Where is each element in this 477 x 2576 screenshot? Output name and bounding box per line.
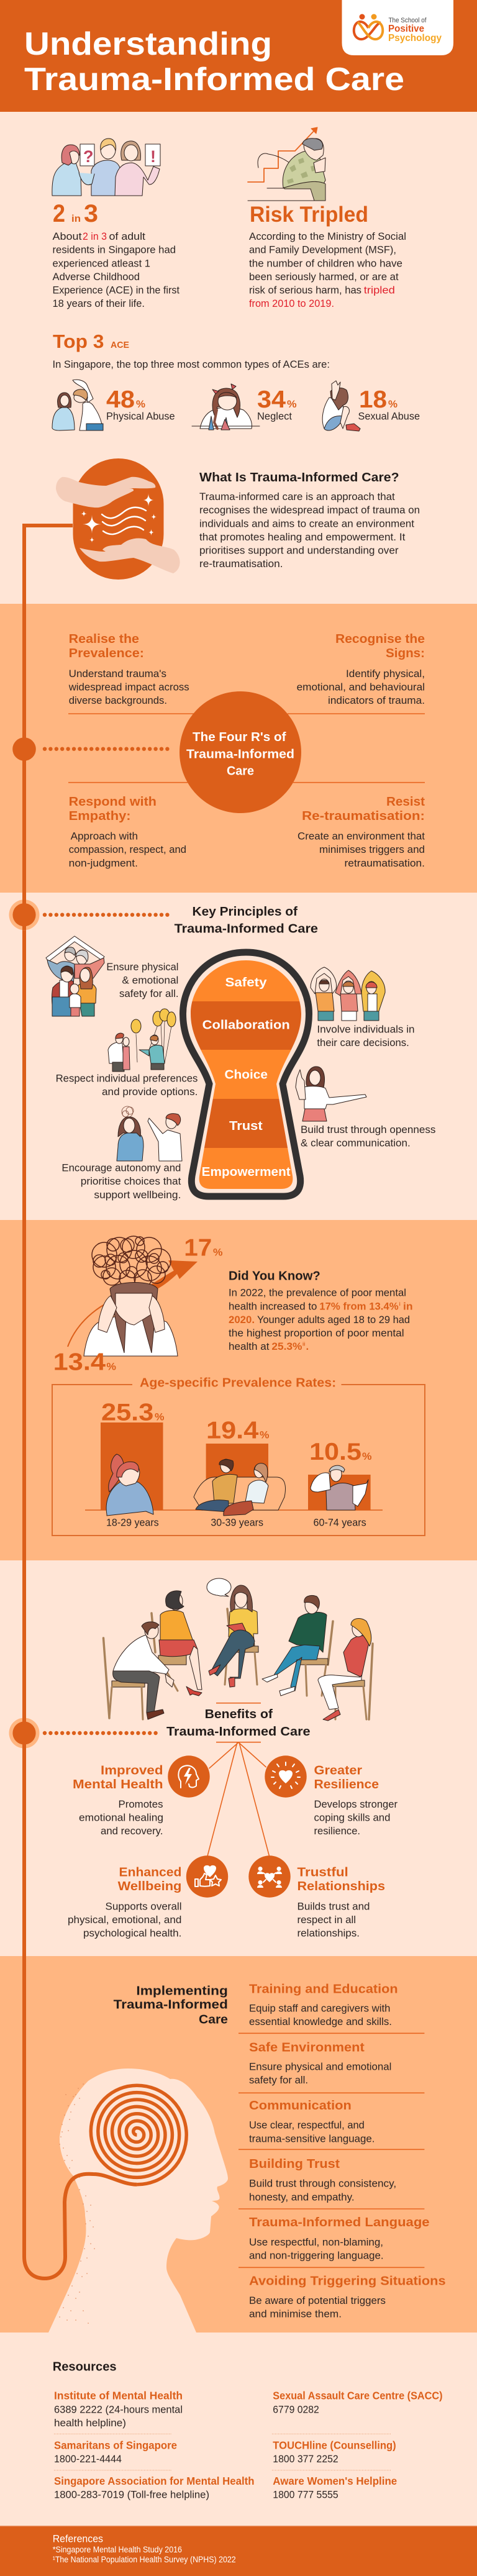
benefit: enhanced wellbeing: Enhanced <box>119 1865 181 1880</box>
text: empowerment description: support wellbeing. <box>94 1189 181 1201</box>
text: did you know body: in <box>403 1300 413 1312</box>
text: did you know body: 25.3% <box>271 1340 302 1352</box>
benefit: enhanced wellbeing: physical, emotional, and <box>68 1914 181 1926</box>
illustration: person on rising stairs <box>248 127 325 201</box>
block: recognise the signs: indicators of trauma. <box>328 694 425 706</box>
illustration: carer untangling a thought <box>117 1106 182 1161</box>
item: communication: Communication <box>249 2098 352 2113</box>
logo card: The School of <box>389 17 427 24</box>
illustration: woman giving thumbs up <box>296 1067 366 1121</box>
stat: 34 percent neglect: Neglect <box>257 411 292 422</box>
heading: implementing <box>114 1984 228 2026</box>
block: recognise the signs: Signs: <box>386 646 425 660</box>
text: trust description <box>301 1124 435 1149</box>
illustration: couple on a sofa <box>194 1459 285 1516</box>
block: realise the prevalence: Prevalence: <box>69 646 144 660</box>
spiral inside head <box>91 2085 186 2185</box>
heading: top 3 ACE <box>53 330 129 352</box>
man in white shirt <box>113 1635 169 1674</box>
labels: age groups: 30-39 years <box>211 1517 263 1529</box>
benefit: improved mental health: Improved <box>101 1764 163 1778</box>
timeline spine with spiral <box>24 526 137 2278</box>
item: avoiding triggering situations: Be aware of potential triggers <box>249 2295 386 2306</box>
text: safety description: safety for all. <box>119 988 179 999</box>
panel: key principles <box>46 904 435 1201</box>
benefit: improved mental health: and recovery. <box>101 1825 163 1837</box>
footer: references <box>0 2526 477 2576</box>
benefit: trustful relationships: Builds trust and <box>297 1900 370 1912</box>
benefit: enhanced wellbeing: Supports overall <box>106 1900 181 1912</box>
resource: touchline: 1800 377 2252 <box>273 2453 338 2465</box>
panel: implementing <box>0 1956 477 2333</box>
text: definition: recognises the widespread impact of trauma on <box>199 504 420 516</box>
block: realise the prevalence: widespread impact across <box>68 681 189 693</box>
text: safety description: Ensure physical <box>106 961 178 973</box>
timeline node: four Rs <box>12 737 168 761</box>
stat: 2 in 3 <box>53 200 98 227</box>
footer: references: References <box>53 2533 103 2545</box>
benefit: greater resilience: Resilience <box>314 1777 379 1791</box>
text: 2 in 3 body: residents in Singapore had <box>52 244 176 256</box>
text: 2 in 3 body: About <box>52 230 82 242</box>
item: trauma-informed language: and non-triggering language. <box>249 2250 384 2262</box>
text: did you know body: In 2022, the prevalence of poor mental <box>229 1287 406 1299</box>
chart arrow: rise from 13.4 to 17 percent <box>68 1260 198 1347</box>
text: risk tripled body: and Family Development (MSF), <box>249 244 396 256</box>
text: trust description: Build trust through openness <box>301 1124 435 1136</box>
resource: samaritans of singapore: Samaritans of Singapore <box>54 2439 177 2451</box>
labels: age groups <box>106 1517 366 1529</box>
chart: age-specific prevalence rates: Age-specific Prevalence Rates: <box>140 1375 336 1390</box>
bar: 60-74 years <box>308 1439 371 1510</box>
stat: 2 in 3: 3 <box>84 200 98 227</box>
resource: singapore association for mental health: Singapore Association for Mental Health <box>54 2475 255 2487</box>
illustration: overwhelmed woman with tangled thoughts <box>84 1236 178 1356</box>
panel: the four Rs <box>0 604 477 893</box>
block: realise the prevalence: Understand trauma's <box>69 668 166 680</box>
illustration: head silhouette <box>48 2069 228 2333</box>
diagram: keyhole of five principles: Trust <box>229 1119 263 1133</box>
text: risk tripled body: tripled <box>364 284 395 296</box>
text: definition <box>199 491 420 570</box>
title: Understanding <box>24 26 272 62</box>
text: 2 in 3 body: 2 in 3 <box>83 230 107 242</box>
stat: 17 percent: % <box>213 1247 222 1258</box>
text: empowerment description: Encourage autonomy and <box>61 1162 181 1174</box>
man in green sweater <box>289 1612 327 1652</box>
resource: institute of mental health: 6389 2222 (24-hours mental <box>54 2403 183 2415</box>
text: 2 in 3 body <box>52 230 179 309</box>
block: recognise the signs <box>297 632 425 706</box>
text: definition: individuals and aims to create an environment <box>199 517 414 529</box>
text: collaboration description <box>317 1023 415 1049</box>
bar: 18-29 years <box>101 1400 164 1510</box>
heading: implementing: Trauma-Informed <box>114 1997 228 2011</box>
text: did you know body: health at <box>229 1340 270 1352</box>
text: choice description: and provide options. <box>102 1086 198 1098</box>
bar: 18-29 years: % <box>155 1411 164 1423</box>
stat: 17 percent: 17 <box>184 1235 212 1262</box>
text: definition: prioritises support and understanding over <box>199 545 399 557</box>
text: did you know body: health increased to <box>229 1300 317 1312</box>
text: did you know body <box>229 1287 413 1352</box>
bar: 30-39 years: % <box>260 1429 270 1441</box>
diagram: keyhole of five principles <box>183 952 309 1196</box>
centre circle: the four Rs: The Four R's of <box>193 730 286 744</box>
block: realise the prevalence: diverse backgrounds. <box>69 694 167 706</box>
text: risk tripled heading: Risk Tripled <box>250 203 368 227</box>
item: safe environment: Safe Environment <box>249 2040 365 2054</box>
item: building trust: honesty, and empathy. <box>249 2191 355 2203</box>
text: definition: Trauma-informed care is an approach that <box>199 491 395 503</box>
illustration: family under a roof <box>46 936 104 1016</box>
item: avoiding triggering situations <box>249 2273 446 2320</box>
text: 2 in 3 body: of adult <box>109 230 145 242</box>
block: resist re-traumatisation <box>298 794 425 869</box>
stat: 34 percent neglect: 34 <box>257 386 286 413</box>
text: risk tripled body: risk of serious harm, has <box>249 284 361 296</box>
benefit: greater resilience: coping skills and <box>314 1812 390 1824</box>
diagram: keyhole of five principles: Safety <box>225 975 267 990</box>
resource: institute of mental health: health helpline) <box>54 2417 126 2429</box>
diagram: keyhole of five principles: Choice <box>225 1068 268 1082</box>
text: did you know body: . <box>306 1340 309 1352</box>
labels: age groups: 60-74 years <box>313 1517 366 1529</box>
benefit: trustful relationships: Trustful <box>297 1865 348 1880</box>
text: empowerment description <box>61 1162 181 1201</box>
item: training and education: essential knowledge and skills. <box>249 2016 392 2028</box>
block: resist re-traumatisation: Resist <box>386 794 425 809</box>
item: communication <box>249 2098 375 2144</box>
illustration: three people making heart shapes <box>311 967 385 1021</box>
resource: sexual assault care centre: 6779 0282 <box>273 2403 319 2415</box>
item: training and education <box>249 1982 398 2028</box>
text: trust description: & clear communication. <box>301 1137 411 1149</box>
text: risk tripled body: According to the Ministry of Social <box>249 230 406 242</box>
block: respond with empathy <box>69 794 186 869</box>
illustration: hands around an oval <box>56 458 180 580</box>
resource: aware women's helpline <box>273 2475 397 2501</box>
speech bubble <box>207 1578 231 1596</box>
timeline node: benefits <box>9 1718 159 1749</box>
resource: aware women's helpline: 1800 777 5555 <box>273 2489 338 2501</box>
item: safe environment <box>249 2040 391 2086</box>
text: collaboration description: Involve individuals in <box>317 1023 415 1035</box>
heading: key principles: Trauma-Informed Care <box>175 922 318 936</box>
benefit: enhanced wellbeing: psychological health. <box>83 1927 181 1939</box>
text: 2 in 3 body: Adverse Childhood <box>52 271 140 283</box>
stat: 18 percent sexual abuse <box>358 386 420 422</box>
benefit: improved mental health: Mental Health <box>73 1777 163 1791</box>
heading: key principles <box>175 904 318 936</box>
block: resist re-traumatisation: minimises triggers and <box>319 844 425 855</box>
block: respond with empathy: Approach with <box>71 831 138 842</box>
central woman in yellow sweater <box>229 1609 258 1646</box>
block: recognise the signs: Identify physical, <box>346 668 425 680</box>
resource: institute of mental health <box>54 2390 183 2429</box>
icon: connected people and heart <box>248 1855 291 1898</box>
text: did you know body: 2020. <box>229 1314 255 1326</box>
stat: 2 in 3: in <box>71 214 81 224</box>
item: training and education: Training and Education <box>249 1982 398 1996</box>
text: risk tripled body <box>249 230 406 309</box>
icon: heart thumb and star <box>186 1855 228 1898</box>
title: Trauma-Informed Care <box>24 61 404 98</box>
panel: resources <box>53 2360 443 2501</box>
stat: 13.4 percent: % <box>106 1361 116 1373</box>
stat: 48 percent physical abuse: Physical Abuse <box>106 411 175 422</box>
illustration: people with light bulbs <box>108 1009 176 1072</box>
block: respond with empathy: non-judgment. <box>69 857 138 869</box>
item: safe environment: safety for all. <box>249 2074 308 2086</box>
benefit: improved mental health: Promotes <box>118 1798 163 1810</box>
bar: 60-74 years: 10.5 <box>309 1439 361 1465</box>
panel: benefits <box>68 1578 398 1939</box>
block: resist re-traumatisation: Create an environment that <box>298 831 425 842</box>
benefit: greater resilience <box>265 1755 398 1837</box>
header panel <box>0 0 477 112</box>
heading: what is trauma-informed care: What Is Trauma-Informed Care? <box>199 470 399 485</box>
item: training and education: Equip staff and caregivers with <box>249 2002 390 2014</box>
text: 2 in 3 body: Experience (ACE) in the first <box>52 284 179 296</box>
benefit: trustful relationships: Relationships <box>297 1879 385 1893</box>
labels: age groups: 18-29 years <box>106 1517 159 1529</box>
illustration: sad young woman <box>106 1454 153 1516</box>
stat: 34 percent neglect: % <box>287 398 297 410</box>
text: definition: re-traumatisation. <box>199 558 283 570</box>
block: recognise the signs: Recognise the <box>335 632 425 646</box>
item: building trust <box>249 2157 396 2203</box>
benefit: enhanced wellbeing: Wellbeing <box>118 1879 181 1893</box>
illustration: three people with signs: ! <box>150 147 156 166</box>
bar: 30-39 years <box>206 1418 270 1510</box>
stat: 17 percent <box>184 1235 222 1262</box>
block: realise the prevalence <box>68 632 189 706</box>
text: risk tripled body: been seriously harmed, or are at <box>249 271 399 283</box>
stat: 18 percent sexual abuse: % <box>388 398 398 410</box>
benefit: improved mental health: emotional healing <box>79 1812 163 1824</box>
text: 2 in 3 body: experienced atleast 1 <box>52 257 150 269</box>
text: did you know body: i <box>399 1301 401 1307</box>
heading: did you know: Did You Know? <box>229 1269 320 1283</box>
text: did you know body: Younger adults aged 18 to 29 had <box>257 1314 410 1326</box>
timeline node: key principles <box>9 899 168 930</box>
benefit: greater resilience: Develops stronger <box>314 1798 398 1810</box>
footer: references: ¹The National Population Health Survey (NPHS) 2022 <box>53 2555 236 2564</box>
text: collaboration description: their care decisions. <box>317 1037 409 1049</box>
illustration: support group in a circle <box>103 1578 373 1721</box>
illustration: sexual abuse <box>322 381 360 431</box>
text: choice description: Respect individual preferences <box>56 1073 198 1085</box>
heading: implementing: Implementing <box>136 1984 228 1998</box>
icon: head with lightning bolt <box>168 1755 210 1798</box>
logo card: Psychology <box>388 33 442 43</box>
block: respond with empathy: Empathy: <box>69 809 131 823</box>
resource: touchline: TOUCHline (Counselling) <box>273 2439 396 2451</box>
text: choice description <box>56 1073 198 1098</box>
text: 2 in 3 body: 18 years of their life. <box>52 298 145 309</box>
item: building trust: Building Trust <box>249 2157 340 2171</box>
item: communication: Use clear, respectful, and <box>249 2119 365 2131</box>
text: risk tripled body: the number of children who have <box>249 257 402 269</box>
resource: samaritans of singapore <box>54 2439 177 2465</box>
diagram: keyhole of five principles: Collaboration <box>202 1018 290 1032</box>
illustration: worried older man <box>311 1465 368 1510</box>
item: safe environment: Ensure physical and emotional <box>249 2060 391 2072</box>
centre circle: the four Rs: Trauma-Informed <box>186 747 294 762</box>
bar: 18-29 years: 25.3 <box>101 1400 153 1426</box>
heading: key principles: Key Principles of <box>193 904 298 919</box>
heading: benefits <box>166 1707 311 1739</box>
block: respond with empathy: Respond with <box>69 794 157 809</box>
item: avoiding triggering situations: and minimise them. <box>249 2308 342 2320</box>
stat: 18 percent sexual abuse: 18 <box>359 386 387 413</box>
stat: 13.4 percent: 13.4 <box>53 1349 106 1376</box>
text: top 3 intro: In Singapore, the top three most common types of ACEs are: <box>52 358 330 370</box>
stat: 48 percent physical abuse: % <box>136 398 145 410</box>
text: did you know body: the highest proportion of poor mental <box>229 1327 404 1339</box>
item: trauma-informed language: Trauma-Informed Language <box>249 2215 430 2229</box>
stat: 2 in 3: 2 <box>53 200 65 227</box>
stat: 34 percent neglect <box>257 386 297 422</box>
text: did you know body: ii <box>302 1342 305 1347</box>
text: safety description: & emotional <box>122 975 178 986</box>
icon: glowing heart <box>265 1755 307 1798</box>
logo card <box>342 0 453 55</box>
illustration: physical abuse <box>52 380 103 430</box>
heading: top 3 ACE: ACE <box>111 340 129 350</box>
item: building trust: Build trust through consistency, <box>249 2178 396 2190</box>
heading: top 3 ACE: Top 3 <box>53 330 104 352</box>
bar: 30-39 years: 19.4 <box>206 1418 259 1444</box>
block: resist re-traumatisation: retraumatisation. <box>344 857 425 869</box>
illustration: three people with signs <box>52 139 160 196</box>
benefit: greater resilience: resilience. <box>314 1825 360 1837</box>
block: realise the prevalence: Realise the <box>69 632 139 646</box>
stat: 48 percent physical abuse <box>106 386 175 422</box>
stat: 18 percent sexual abuse: Sexual Abuse <box>358 411 420 422</box>
title <box>24 26 404 98</box>
text: safety description <box>106 961 179 999</box>
resource: aware women's helpline: Aware Women's Helpline <box>273 2475 397 2487</box>
illustration: neglect <box>192 384 260 430</box>
centre circle: the four Rs <box>179 691 301 813</box>
benefit: greater resilience: Greater <box>314 1764 362 1778</box>
text: risk tripled body: from 2010 to 2019. <box>249 298 334 309</box>
item: avoiding triggering situations: Avoiding Triggering Situations <box>249 2273 446 2288</box>
panel: statistics <box>52 127 420 431</box>
illustration: three people with signs: ? <box>83 147 93 166</box>
heading: benefits: Benefits of <box>205 1707 273 1721</box>
woman in red jacket <box>343 1636 370 1677</box>
block: recognise the signs: emotional, and behavioural <box>297 681 425 693</box>
text: did you know body: 17% from 13.4% <box>319 1300 399 1312</box>
resource: singapore association for mental health: 1800-283-7019 (Toll-free helpline) <box>54 2489 209 2501</box>
stat: 48 percent physical abuse: 48 <box>106 386 135 413</box>
benefit: trustful relationships <box>248 1855 385 1939</box>
item: communication: trauma-sensitive language. <box>249 2132 375 2144</box>
bar: 60-74 years: % <box>362 1450 371 1462</box>
diagram: keyhole of five principles: Empowerment <box>202 1165 291 1179</box>
chart: age-specific prevalence rates <box>52 1375 425 1536</box>
benefit: trustful relationships: relationships. <box>297 1927 360 1939</box>
resource: institute of mental health: Institute of Mental Health <box>54 2390 183 2402</box>
benefit: improved mental health <box>73 1755 210 1837</box>
benefit: enhanced wellbeing <box>68 1855 228 1939</box>
resource: samaritans of singapore: 1800-221-4444 <box>54 2453 122 2465</box>
text: definition: that promotes healing and empowerment. It <box>199 531 406 543</box>
footer: references: *Singapore Mental Health Study 2016 <box>53 2545 182 2554</box>
benefit: trustful relationships: respect in all <box>297 1914 356 1926</box>
item: trauma-informed language <box>249 2215 430 2262</box>
woman in orange sweater <box>160 1611 194 1643</box>
panel: what is trauma-informed care <box>56 458 420 580</box>
heading: benefits: Trauma-Informed Care <box>166 1724 311 1739</box>
centre circle: the four Rs: Care <box>227 764 254 778</box>
heading: resources: Resources <box>53 2360 117 2374</box>
panel: did you know <box>0 1220 477 1560</box>
item: trauma-informed language: Use respectful, non-blaming, <box>249 2236 383 2248</box>
block: resist re-traumatisation: Re-traumatisation: <box>302 809 425 823</box>
logo card: Positive <box>388 24 424 34</box>
resource: sexual assault care centre: Sexual Assault Care Centre (SACC) <box>273 2390 443 2402</box>
heading: implementing: Care <box>199 2012 228 2026</box>
block: respond with empathy: compassion, respect, and <box>69 844 186 855</box>
resource: touchline <box>273 2439 396 2465</box>
resource: singapore association for mental health <box>54 2475 255 2501</box>
text: empowerment description: prioritise choices that <box>81 1175 181 1187</box>
resource: sexual assault care centre <box>273 2390 443 2415</box>
